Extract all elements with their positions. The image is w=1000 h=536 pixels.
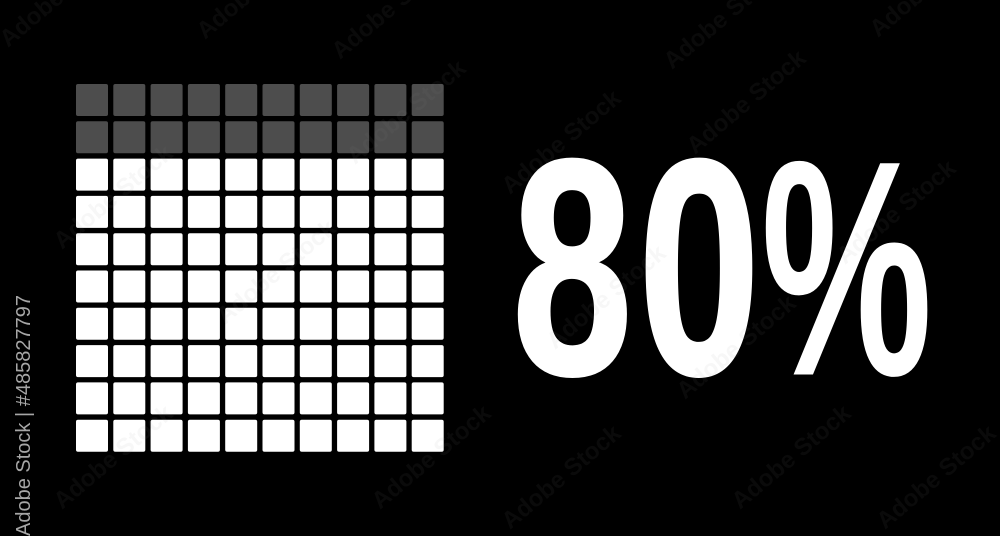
- big percentage value: %: [761, 98, 932, 440]
- stock watermarks: Adobe Stock: [497, 84, 627, 200]
- waffle chart: 80 of 100 squares filled: [76, 84, 444, 452]
- stock watermarks: Adobe Stock: [542, 239, 672, 355]
- big percentage value: 8: [512, 96, 633, 439]
- stock watermarks: Adobe Stock: [672, 289, 802, 405]
- stock watermarks: Adobe Stock: [727, 399, 857, 515]
- vertical image id credit: Adobe Stock | #485827797: [13, 295, 35, 536]
- stock watermarks: Adobe Stock: [49, 139, 179, 255]
- stock watermarks: Adobe Stock: [212, 214, 342, 330]
- stock watermarks: Adobe Stock: [342, 54, 472, 170]
- stock watermarks: Adobe Stock: [49, 399, 179, 515]
- unfilled rows: 20 grey squares: [76, 84, 444, 153]
- filled rows: 80 white squares: [76, 159, 444, 452]
- stock watermarks: Adobe Stock: [832, 154, 962, 270]
- stock watermarks: Adobe Stock: [682, 44, 812, 160]
- stock watermarks: Adobe Stock: [497, 419, 627, 535]
- stock watermarks: Adobe Stock: [367, 399, 497, 515]
- stock watermarks: Adobe Stock: [872, 419, 1000, 535]
- big percentage value: 0: [638, 95, 760, 439]
- big percentage value: [512, 95, 932, 440]
